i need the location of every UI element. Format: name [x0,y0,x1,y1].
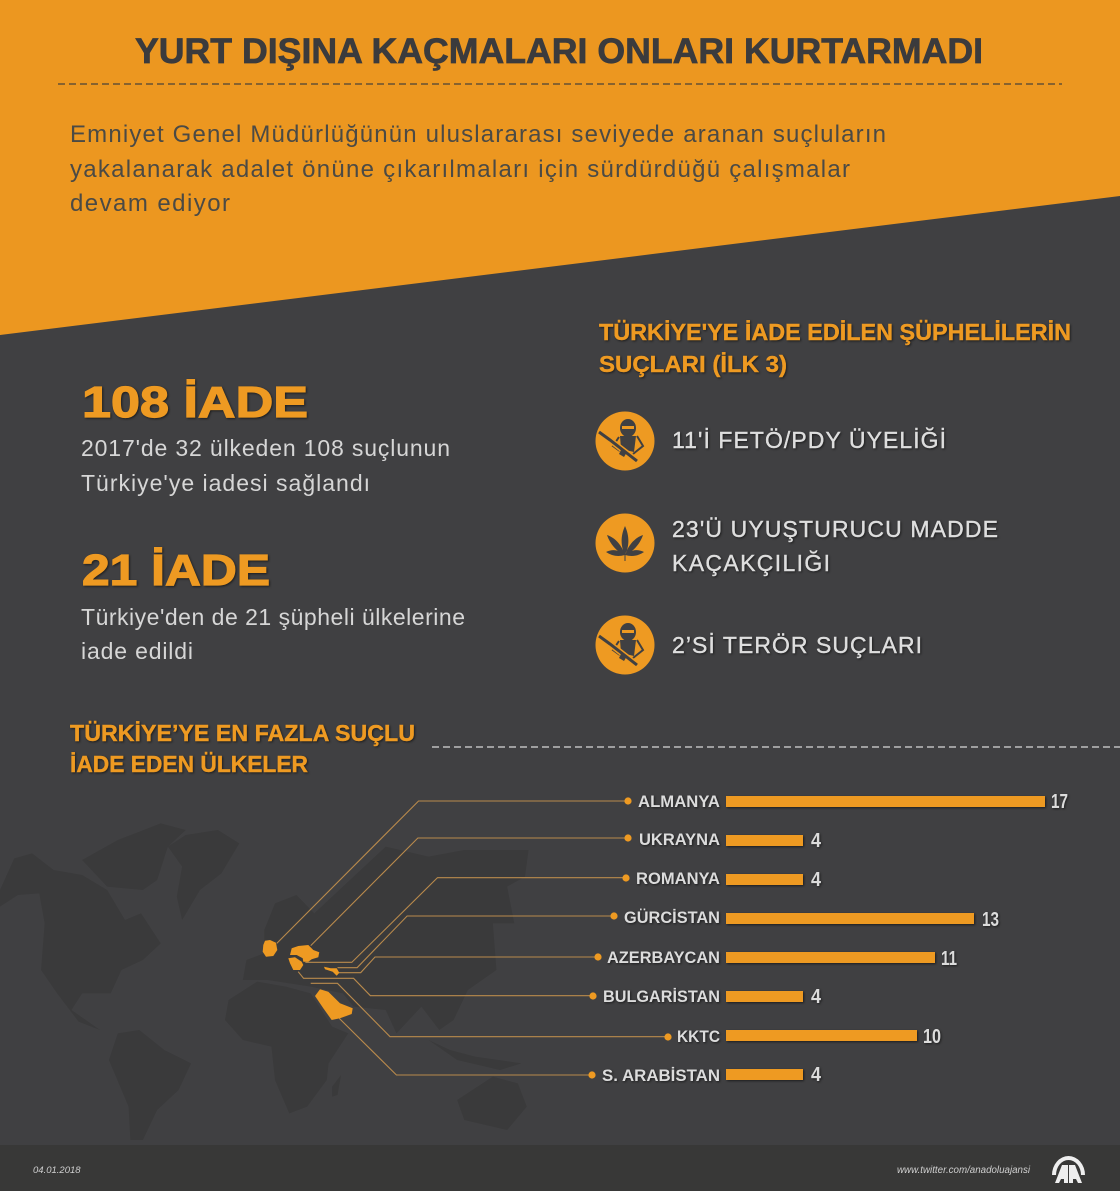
Ukrayna row: UKRAYNA [639,830,720,849]
Romanya row [622,869,822,891]
heading: top 3 crimes: TÜRKİYE'YE İADE EDİLEN ŞÜPHELİLERİN [599,319,1071,345]
stat: 21 iade: Türkiye'den de 21 şüpheli ülkelerine [81,604,465,630]
crime: drug trafficking: 23'Ü UYUŞTURUCU MADDE [672,516,998,542]
stat: 108 iade: Türkiye'ye iadesi sağlandı [81,470,370,496]
heading: top 3 crimes [599,319,1071,377]
crime: membership: 11'İ FETÖ/PDY ÜYELİĞİ [672,427,946,453]
intro paragraph [70,121,886,217]
Romanya row: ROMANYA [636,869,720,888]
chart: countries bars [588,791,1068,1086]
stat: 21 iade: iade edildi [81,638,193,664]
stat: 21 iade [81,546,465,664]
stat: 108 iade [81,378,450,496]
header orange banner [0,0,1120,335]
KKTC row: KKTC [677,1027,720,1046]
icon: armed militant 2 [596,616,654,674]
Ukrayna row [624,830,822,852]
Azerbaycan row: 11 [941,948,957,970]
Bulgaristan row: 4 [811,986,822,1008]
crime: drug trafficking [672,516,998,576]
stat: 21 iade: 21 İADE [82,546,270,595]
stat: 108 iade: 2017'de 32 ülkeden 108 suçlunun [81,435,450,461]
KKTC row [664,1026,941,1048]
crime: drug trafficking: KAÇAKÇILIĞI [672,550,830,576]
heading: countries: TÜRKİYE’YE EN FAZLA SUÇLU [70,720,415,746]
date: 04.01.2018 [33,1165,81,1176]
S. Arabistan row [588,1064,822,1086]
heading: countries [70,720,415,777]
S. Arabistan row: 4 [811,1064,822,1086]
intro paragraph: Emniyet Genel Müdürlüğünün uluslararası seviyede aranan suçluların [70,121,886,148]
crime: terror: 2’Sİ TERÖR SUÇLARI [672,632,922,658]
highlighted countries [263,940,353,1020]
Gürcistan row [610,908,999,931]
Almanya row: ALMANYA [638,792,720,811]
Azerbaycan row: AZERBAYCAN [607,948,720,967]
Ukrayna row: 4 [811,830,822,852]
footer band [0,1145,1120,1191]
Azerbaycan row [594,948,957,970]
leader lines [277,801,668,1075]
Almanya row: 17 [1051,791,1068,813]
KKTC row: 10 [923,1026,941,1048]
Bulgaristan row: BULGARİSTAN [603,987,720,1006]
stat: 108 iade: 108 İADE [82,378,308,427]
heading: countries: İADE EDEN ÜLKELER [70,751,308,777]
S. Arabistan row: S. ARABİSTAN [602,1066,720,1085]
heading: top 3 crimes: SUÇLARI (İLK 3) [599,351,787,377]
icon: armed militant 1 [596,412,654,470]
source url: www.twitter.com/anadoluajansi [897,1165,1031,1176]
Gürcistan row: GÜRCİSTAN [624,908,720,927]
Gürcistan row: 13 [982,909,999,931]
world map [0,801,668,1140]
intro paragraph: yakalanarak adalet önüne çıkarılmaları için sürdürdüğü çalışmalar [70,156,850,183]
intro paragraph: devam ediyor [70,190,230,217]
title: YURT DIŞINA KAÇMALARI ONLARI KURTARMADI [135,32,983,71]
Bulgaristan row [589,986,822,1008]
logo: AA [1052,1156,1085,1183]
icon: cannabis leaf [596,514,654,572]
Almanya row [624,791,1068,813]
Romanya row: 4 [811,869,822,891]
